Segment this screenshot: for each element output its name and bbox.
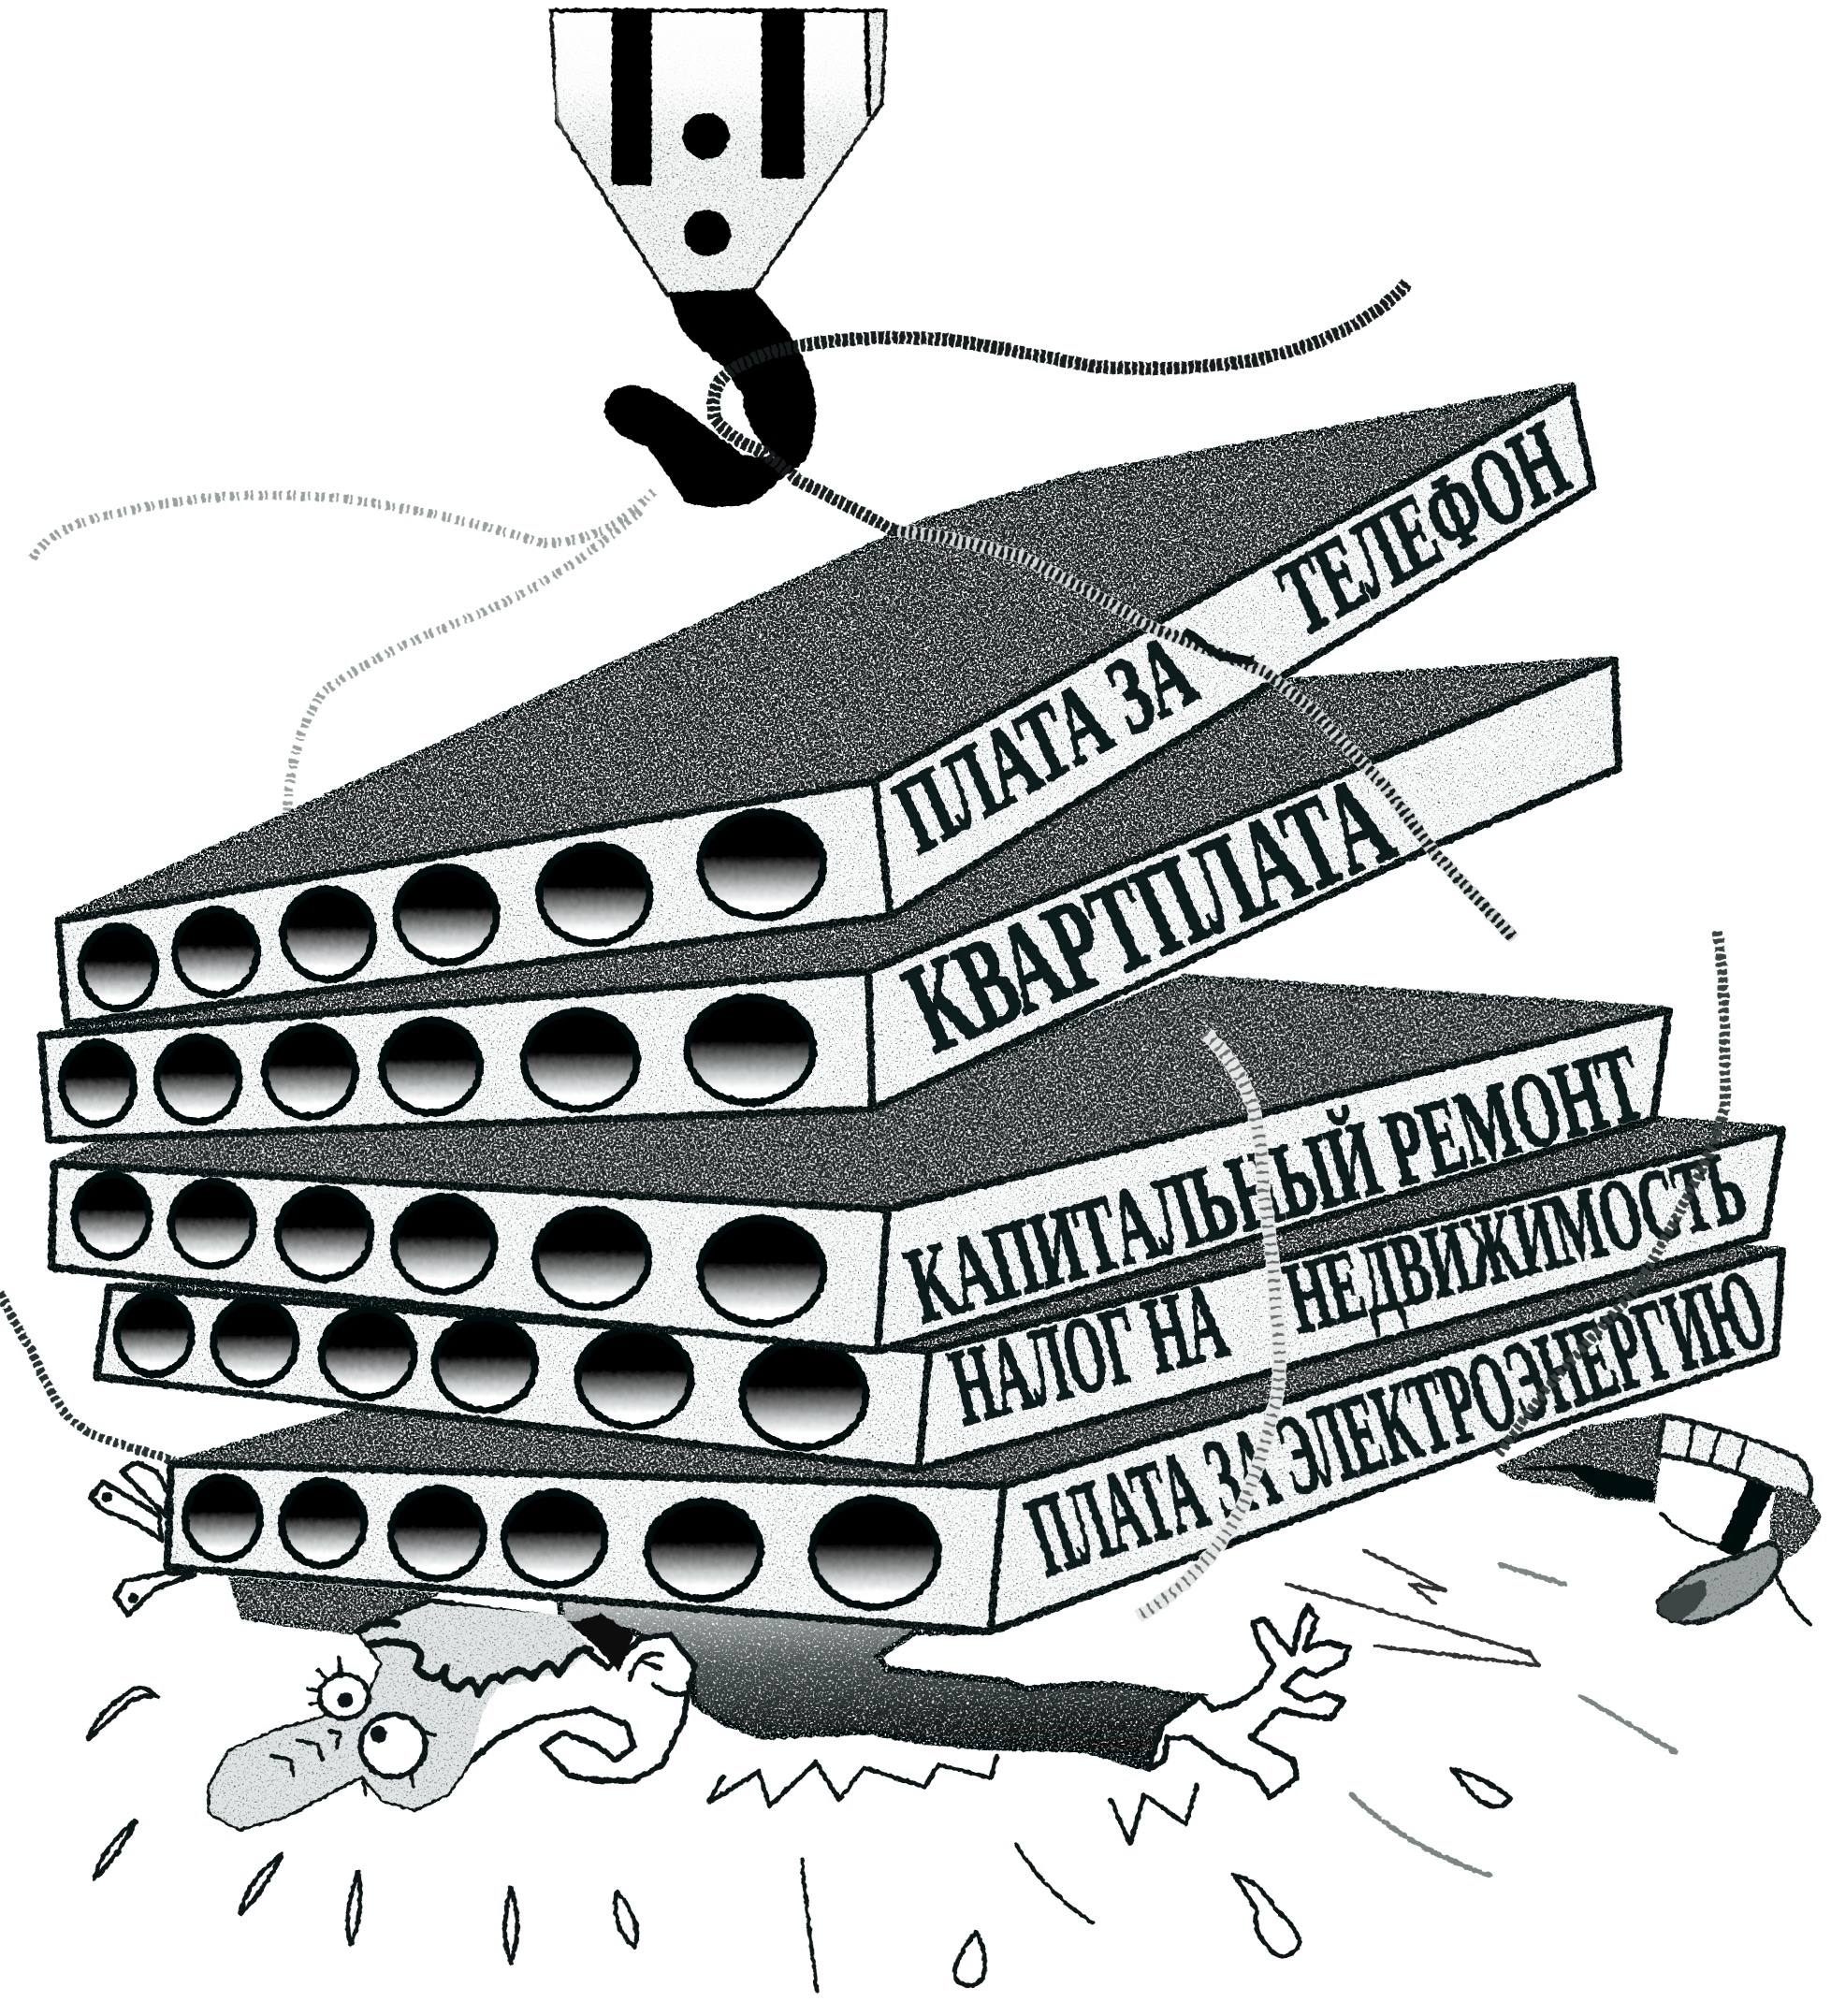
slab 1: telephone fee — [58, 386, 1592, 1024]
man's legs and shoe — [1500, 1416, 1818, 1624]
slab 5: electricity fee — [167, 1245, 1782, 1632]
man's torso and arm — [559, 1597, 1200, 1769]
pale rope left — [33, 491, 653, 812]
lashes and nose wrinkles — [271, 1658, 434, 1794]
crane hook — [603, 290, 816, 507]
lower dark rope — [1499, 931, 1725, 1455]
ear — [630, 1654, 688, 1694]
left hand gripping the bottom slab — [0, 1293, 194, 1615]
hair — [358, 1622, 591, 1694]
man's head — [210, 1601, 694, 1828]
splash lines — [708, 1550, 1676, 1877]
slab 3: major repairs — [51, 978, 1669, 1351]
eye left — [319, 1675, 369, 1719]
head outline — [210, 1601, 694, 1828]
crane block — [551, 10, 886, 295]
slab 2: rent — [41, 660, 1619, 1140]
label: property tax — [940, 1130, 1757, 1448]
stippled face — [210, 1603, 591, 1828]
dark wedge beside ear — [569, 1614, 633, 1672]
label: telephone fee: ТЕЛЕФОН — [1263, 399, 1583, 660]
water drops — [88, 1688, 1510, 1992]
main dark rope — [713, 283, 1514, 939]
man's back under the slab — [233, 1580, 429, 1632]
lower pale rope — [1138, 1033, 1280, 1617]
man's hand — [1148, 1606, 1348, 1797]
slab 4: property tax — [96, 1120, 1782, 1470]
figure: crushed man — [88, 1416, 1818, 1992]
label: telephone fee: ПЛАТА ЗА — [879, 610, 1211, 877]
label: telephone fee — [879, 399, 1583, 877]
label: rent: КВАРТПЛАТА — [886, 748, 1411, 1081]
eye right — [361, 1715, 426, 1777]
label: property tax: НАЛОГ НА — [940, 1260, 1237, 1448]
